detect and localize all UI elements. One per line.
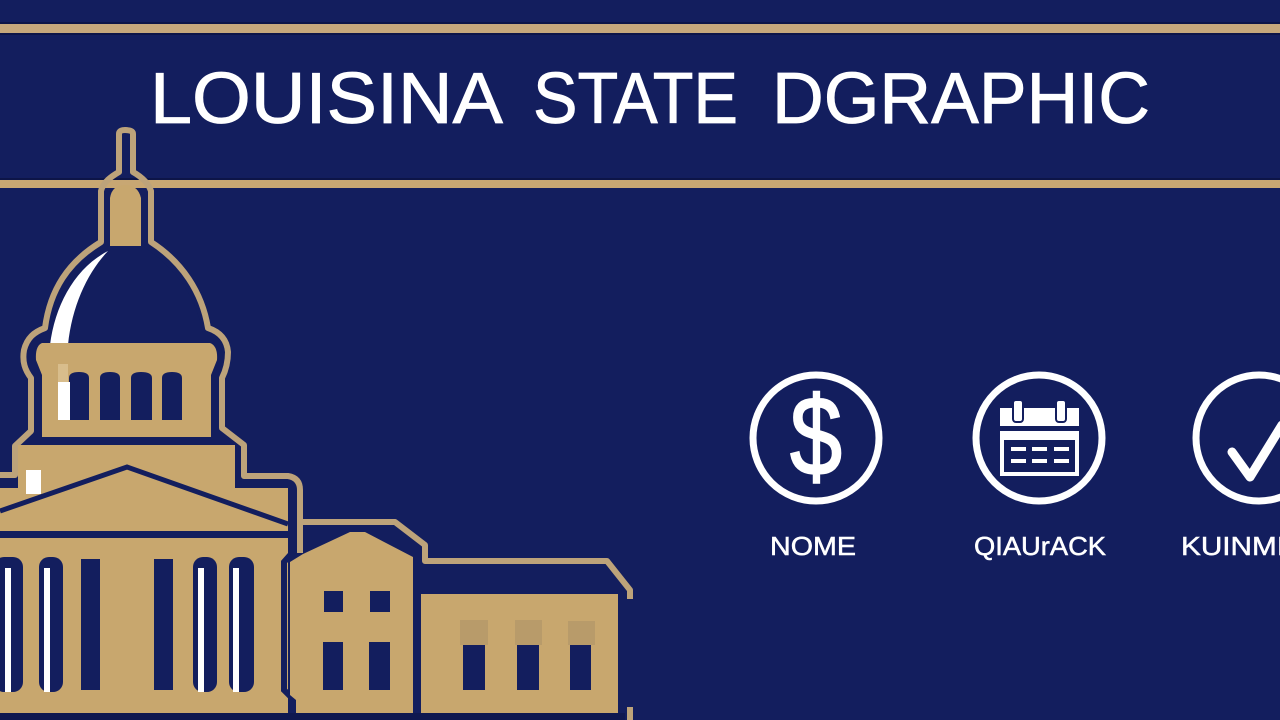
- icon: dollar: $: [790, 374, 842, 499]
- title: STATE: [533, 59, 738, 139]
- title: DGRAPHIC: [772, 59, 1150, 139]
- title: LOUISINA: [150, 59, 503, 139]
- ground line: [0, 713, 625, 720]
- divider between portico and wing: [284, 525, 292, 716]
- drum with windows: [36, 343, 217, 437]
- top gold rule: [0, 22, 1280, 35]
- pediment: [0, 467, 288, 524]
- portico: [0, 531, 290, 713]
- label: nome: NOME: [770, 531, 856, 561]
- building outline: [0, 130, 630, 720]
- icon: check mark: [1196, 375, 1280, 501]
- dome highlight: [50, 251, 108, 345]
- lower gold rule: [0, 178, 1280, 188]
- label: quaurack: QIAUrACK: [974, 531, 1107, 561]
- columns: [0, 557, 23, 692]
- left wing: [290, 532, 413, 713]
- right wing: [421, 594, 618, 713]
- icon: dollar: [753, 374, 879, 501]
- label: kuinni: KUINMI: [1181, 531, 1280, 561]
- small white window: [26, 470, 41, 494]
- icon: calendar: [976, 375, 1102, 501]
- drum base tier: [0, 445, 288, 535]
- lantern: [110, 185, 141, 246]
- navy mask behind dome: [54, 245, 203, 343]
- title: [150, 59, 1150, 139]
- capitol building illustration: [0, 130, 630, 720]
